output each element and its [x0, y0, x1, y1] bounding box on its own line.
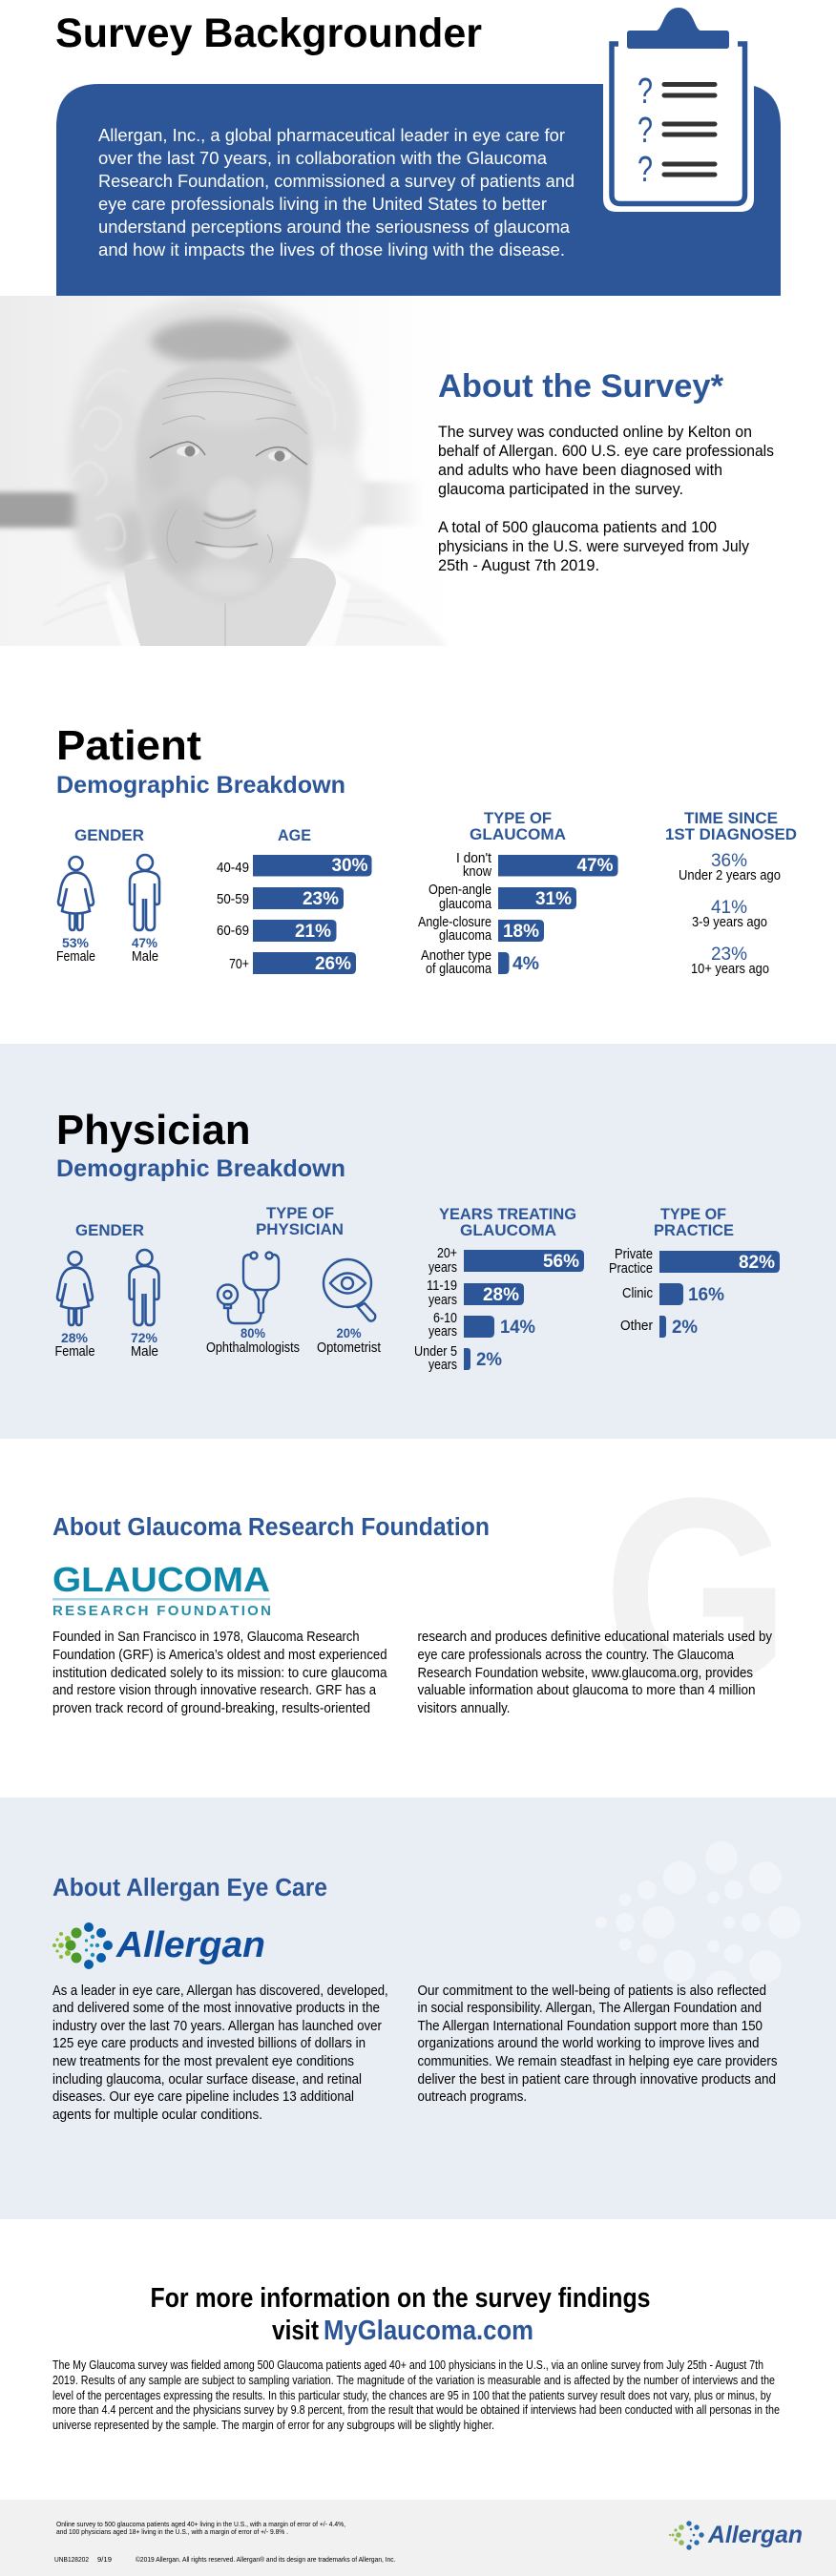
bar chart: type of practice: PRACTICE [654, 1221, 734, 1239]
panel: patient gender: Male [132, 948, 158, 965]
panel: physician gender: GENDER [75, 1221, 144, 1239]
footnote: ©2019 Allergan. All rights reserved. Allergan® and its design are trademarks of Allergan, Inc. [136, 2555, 395, 2564]
bar chart: type of glaucoma: 31% [535, 889, 572, 909]
bar chart: type of practice [609, 1205, 780, 1338]
bar chart: years treating glaucoma: 6-10 [433, 1310, 457, 1326]
heading: physician: Physician [56, 1107, 250, 1153]
panel: physician gender: Male [131, 1343, 158, 1360]
panel: type of physician: Optometrist [317, 1340, 382, 1356]
text block: glaucoma research foundation: and restore vision through innovative research. GRF has a [52, 1682, 377, 1698]
bar chart: type of practice: Other [620, 1318, 653, 1334]
heading: physician: Demographic Breakdown [56, 1155, 345, 1182]
text block: allergan: new treatments for the most prevalent eye conditions [52, 2053, 354, 2069]
intro text: eye care professionals living in the United States to better [98, 195, 547, 214]
heading: about glaucoma research foundation: About Glaucoma Research Foundation [52, 1514, 490, 1541]
panel: intro [56, 84, 781, 296]
text block: glaucoma research foundation: visitors annually. [418, 1700, 510, 1716]
panel: physician background [0, 1044, 836, 1439]
panel: allergan background [0, 1797, 836, 2219]
bar chart: type of glaucoma: GLAUCOMA [470, 825, 566, 843]
bar chart: type of practice: 16% [688, 1285, 724, 1305]
footnote: UNB128202 [54, 2555, 89, 2564]
bar chart: patient age: 23% [303, 889, 339, 909]
intro text [98, 126, 575, 260]
bar chart: years treating glaucoma: 11-19 [427, 1278, 457, 1294]
photo: portrait of older woman [0, 296, 443, 646]
bar chart: type of practice: TYPE OF [660, 1205, 726, 1223]
text block: about the survey: The survey was conducted online by Kelton on [438, 424, 752, 441]
bar chart: patient age: 40-49 [217, 860, 249, 876]
text block: about the survey: glaucoma participated in the survey. [438, 481, 683, 498]
text block: allergan [52, 1983, 777, 2123]
text block: allergan: communities. We remain steadfast in helping eye care providers [418, 2053, 777, 2069]
text block: glaucoma research foundation: Research Foundation website, www.glaucoma.org, provides [418, 1665, 753, 1681]
bar chart: type of practice: Clinic [622, 1285, 653, 1301]
text block: allergan: The Allergan International Foundation support more than 150 [418, 2018, 763, 2034]
logo: allergan footer [669, 2521, 803, 2550]
bar chart: type of glaucoma: Angle-closure [418, 914, 491, 930]
text block: allergan: industry over the last 70 years. Allergan has launched over [52, 2018, 382, 2034]
logo: glaucoma research foundation [52, 1560, 271, 1619]
heading: about the survey: About the Survey* [438, 368, 724, 405]
panel: time since first diagnosed: 36% [711, 851, 747, 871]
footnote: and 100 physicians aged 18+ living in the U.S., with a margin of error of +/- 9.8% . [56, 2527, 288, 2536]
intro text: over the last 70 years, in collaboration with the Glaucoma [98, 149, 548, 168]
intro text: Allergan, Inc., a global pharmaceutical leader in eye care for [98, 126, 565, 145]
panel: footer [0, 2500, 836, 2576]
bar chart: type of glaucoma: I don't [456, 850, 492, 866]
bar chart: type of glaucoma: Another type [421, 947, 491, 964]
bar chart: patient age: 26% [315, 954, 351, 974]
text block: allergan: diseases. Our eye care pipeline includes 13 additional [52, 2088, 354, 2105]
text block: glaucoma research foundation: proven track record of ground-breaking, results-oriented [52, 1700, 370, 1716]
text block: glaucoma research foundation: eye care professionals across the country. The Glaucoma [418, 1647, 735, 1663]
panel: physician gender: Female [55, 1343, 95, 1360]
heading: more information: MyGlaucoma.com [324, 2316, 533, 2346]
icon: clipboard [603, 8, 754, 212]
bar chart: type of glaucoma [418, 809, 618, 977]
icon: male physician [130, 1250, 158, 1325]
panel: patient gender: 53% [62, 935, 90, 950]
bar chart: type of glaucoma: 18% [503, 922, 539, 942]
text block: glaucoma research foundation [52, 1629, 772, 1716]
intro text: understand perceptions around the seriousness of glaucoma [98, 218, 571, 237]
bar chart: type of practice: 2% [672, 1318, 698, 1338]
heading: more information: For more information on the survey findings [151, 2283, 651, 2314]
text block: about the survey: physicians in the U.S. were surveyed from July [438, 538, 750, 555]
bar chart: years treating glaucoma: years [428, 1357, 457, 1373]
bar chart: years treating glaucoma: years [428, 1323, 457, 1340]
text block: allergan: Our commitment to the well-being of patients is also reflected [418, 1983, 766, 1999]
text block: about the survey: and adults who have been diagnosed with [438, 462, 722, 479]
watermark: allergan dots [596, 1841, 801, 2003]
intro text: Research Foundation, commissioned a survey of patients and [98, 172, 575, 191]
bar chart: type of glaucoma: glaucoma [439, 927, 492, 944]
bar chart: patient age: 60-69 [217, 923, 249, 939]
bar chart: patient age: 70+ [229, 956, 249, 972]
bar chart: type of glaucoma: know [463, 863, 491, 880]
text block: about the survey: A total of 500 glaucoma patients and 100 [438, 519, 717, 536]
text block: survey methodology [52, 2358, 780, 2432]
bar chart: patient age [217, 826, 372, 974]
text block: allergan: and delivered some of the most innovative products in the [52, 2000, 380, 2016]
text block: allergan: As a leader in eye care, Allergan has discovered, developed, [52, 1983, 388, 1999]
text block: glaucoma research foundation: valuable information about glaucoma to more than 4 million [418, 1682, 756, 1698]
bar chart: type of glaucoma: of glaucoma [426, 961, 492, 977]
text block: allergan: organizations around the world working to improve lives and [418, 2035, 760, 2051]
text block: allergan: outreach programs. [418, 2088, 527, 2105]
panel: time since first diagnosed: TIME SINCE [684, 809, 778, 827]
panel: type of physician: 80% [240, 1325, 266, 1340]
heading: patient [56, 722, 345, 799]
bar chart: type of glaucoma: 47% [576, 856, 614, 876]
panel: time since first diagnosed: Under 2 years ago [679, 867, 781, 883]
bar chart: years treating glaucoma [414, 1205, 584, 1373]
panel: time since first diagnosed: 41% [711, 898, 747, 918]
panel: time since first diagnosed: 10+ years ago [691, 961, 769, 977]
logo: allergan footer: Allergan [707, 2522, 803, 2548]
bar chart: years treating glaucoma: 20+ [437, 1245, 457, 1261]
icon: stethoscope [218, 1252, 279, 1323]
footnote: Online survey to 500 glaucoma patients aged 40+ living in the U.S., with a margin of error of +/- 4.4%, [56, 2520, 345, 2528]
bar chart: years treating glaucoma: years [428, 1259, 457, 1276]
text block: survey methodology: universe represented by the sample. The margin of error for any subgroups will be slightly higher. [52, 2419, 494, 2432]
text block: about the survey: 25th - August 7th 2019. [438, 557, 599, 574]
bar chart: years treating glaucoma: GLAUCOMA [460, 1221, 556, 1239]
bar chart: years treating glaucoma: 28% [483, 1285, 519, 1305]
panel: type of physician [206, 1204, 382, 1356]
panel: time since first diagnosed [665, 809, 797, 977]
bar chart: years treating glaucoma: Under 5 [414, 1343, 457, 1360]
panel: patient gender: 47% [132, 935, 158, 950]
bar chart: type of glaucoma: 4% [512, 954, 539, 974]
intro text: and how it impacts the lives of those living with the disease. [98, 240, 565, 260]
text block: allergan: including glaucoma, ocular surface disease, and retinal [52, 2071, 362, 2088]
panel: patient gender [56, 826, 159, 965]
bar chart: type of glaucoma: Open-angle [428, 882, 491, 898]
panel: physician gender [55, 1221, 158, 1360]
logo: allergan: Allergan [115, 1925, 265, 1965]
heading: patient: Demographic Breakdown [56, 772, 345, 799]
icon: clipboard: ? [637, 150, 653, 190]
bar chart: years treating glaucoma: years [428, 1292, 457, 1308]
bar chart: type of glaucoma: TYPE OF [484, 809, 552, 827]
bar chart: type of practice: Practice [609, 1260, 653, 1277]
bar chart: patient age: 21% [295, 922, 331, 942]
text block: glaucoma research foundation: Foundation (GRF) is America’s oldest and most experienced [52, 1647, 387, 1663]
heading: about allergan eye care: About Allergan Eye Care [52, 1875, 327, 1901]
panel: time since first diagnosed: 3-9 years ago [692, 914, 767, 930]
bar chart: type of practice: 82% [739, 1253, 775, 1273]
heading: patient: Patient [56, 722, 201, 769]
bar chart: years treating glaucoma: 56% [543, 1252, 579, 1272]
heading: more information [151, 2283, 651, 2346]
panel: type of physician: 20% [336, 1325, 362, 1340]
icon: male [130, 855, 159, 930]
text block: allergan: in social responsibility. Allergan, The Allergan Foundation and [418, 2000, 762, 2016]
bar chart: type of practice: Private [615, 1246, 653, 1262]
panel: physician gender: 72% [131, 1330, 158, 1345]
panel: patient gender: Female [56, 948, 95, 965]
footnote [54, 2520, 395, 2564]
text block: about the survey [438, 424, 774, 574]
footnote: 9/19 [97, 2555, 112, 2564]
bar chart: patient age: 50-59 [217, 891, 249, 907]
title: Survey Backgrounder [55, 10, 482, 56]
bar chart: patient age: 30% [332, 856, 368, 876]
text block: glaucoma research foundation: Founded in San Francisco in 1978, Glaucoma Research [52, 1629, 359, 1645]
icon: female [58, 857, 94, 930]
text block: allergan: deliver the best in patient care through innovative products and [418, 2071, 776, 2088]
bar chart: years treating glaucoma: 2% [476, 1350, 502, 1370]
bar chart: years treating glaucoma: 14% [500, 1318, 535, 1338]
bar chart: years treating glaucoma: YEARS TREATING [439, 1205, 576, 1223]
icon: eye magnifier [324, 1259, 375, 1321]
icon: female physician [57, 1252, 93, 1325]
panel: patient gender: GENDER [74, 826, 144, 844]
bar chart: type of glaucoma: glaucoma [439, 896, 492, 912]
heading: more information: visit [272, 2316, 319, 2346]
panel: time since first diagnosed: 1ST DIAGNOSED [665, 825, 797, 843]
panel: type of physician: PHYSICIAN [256, 1220, 344, 1238]
text block: about the survey: behalf of Allergan. 600 U.S. eye care professionals [438, 443, 774, 460]
icon: clipboard: ? [637, 72, 653, 112]
text block: glaucoma research foundation: research and produces definitive educational materials used by [418, 1629, 772, 1645]
panel: type of physician: TYPE OF [266, 1204, 334, 1222]
icon: clipboard: ? [637, 111, 653, 151]
logo: glaucoma research foundation: RESEARCH FOUNDATION [52, 1603, 271, 1619]
text block: allergan: 125 eye care products and invested billions of dollars in [52, 2035, 366, 2051]
bar chart: patient age: AGE [278, 826, 311, 844]
panel: type of physician: Ophthalmologists [206, 1340, 300, 1356]
logo: allergan [52, 1922, 265, 1969]
logo: glaucoma research foundation: GLAUCOMA [52, 1560, 270, 1599]
panel: time since first diagnosed: 23% [711, 945, 747, 965]
text block: glaucoma research foundation: institution dedicated solely to its mission: to cure glaucoma [52, 1665, 387, 1681]
text block: allergan: agents for multiple ocular conditions. [52, 2107, 262, 2123]
heading: physician [56, 1107, 345, 1182]
watermark: large letter G: G [603, 1442, 790, 1743]
panel: physician gender: 28% [61, 1330, 89, 1345]
